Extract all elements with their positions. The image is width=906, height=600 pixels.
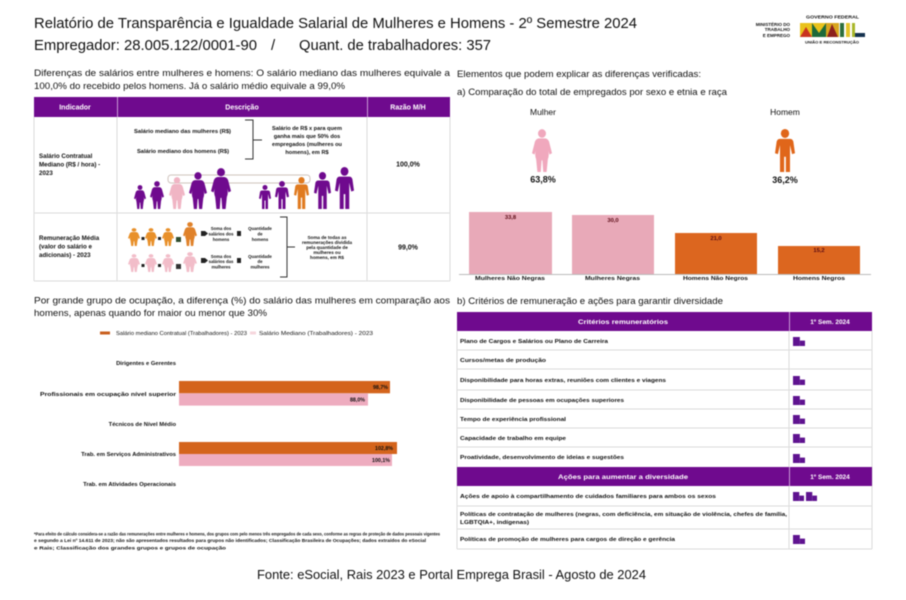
chart legend: Salário mediano Contratual (Trabalhadores) - 2023: [116, 331, 247, 337]
table header: [34, 97, 450, 117]
row 2 formula: mulheres ou: [313, 250, 341, 255]
government logos: MINISTÉRIO DO: [756, 20, 790, 27]
actions header: 1º Sem. 2024: [810, 474, 850, 481]
icon: men average group: [128, 222, 197, 246]
bar chart: occupation groups: Trab. em Serviços Administrativos: [81, 452, 176, 458]
row 2 formula: Quantidade: [248, 254, 272, 259]
actions header: Ações para aumentar a diversidade: [558, 474, 688, 481]
actions header: [457, 467, 872, 486]
row 1 label: [39, 153, 100, 177]
icon: criteria check marks: [793, 337, 805, 463]
footnote: [34, 532, 441, 550]
bar chart: employees by sex and race: 30,0: [607, 218, 619, 224]
icon: action check marks: [793, 492, 817, 544]
icon: woman: [532, 129, 552, 172]
footnote: e Rais; Classificação dos grandes grupos e grupos de ocupação: [34, 546, 226, 550]
government logos: E EMPREGO: [763, 33, 790, 38]
bar chart: employees by sex and race: 33,8: [505, 215, 517, 221]
row 2 formula: [201, 217, 352, 277]
panel: salary indicator table: [34, 97, 450, 281]
panel: men share: Homem: [770, 107, 800, 117]
bar chart: employees by sex and race: 15,2: [813, 248, 825, 254]
bar chart: occupation groups: Profissionais em ocupação nível superior: [40, 392, 177, 398]
row 1 description formula: homens), em R$: [285, 150, 329, 156]
heading: explaining elements: Elementos que podem explicar as diferenças verificadas:: [457, 69, 701, 79]
row 2 formula: de: [257, 259, 263, 264]
bar chart: occupation groups: Técnicos de Nível Médio: [109, 422, 176, 428]
heading: occupation groups: Por grande grupo de ocupação, a diferença (%) do salário das mulheres em comparação aos: [34, 296, 450, 306]
footnote: *Para efeito de cálculo considera-se a razão das remunerações entre mulheres e homens, dos grupos com pelo menos três empregados de cada sexo, conforme as regras de proteção de dados pessoais vigentes: [34, 532, 441, 536]
criteria rows: Proatividade, desenvolvimento de ideias e sugestões: [460, 455, 624, 461]
row 2 formula: salários das: [209, 259, 234, 264]
row 1 description formula: Salário mediano dos homens (R$): [137, 149, 229, 155]
criteria rows: Capacidade de trabalho em equipe: [460, 436, 567, 442]
row 1 description formula: empregados (mulheres ou: [272, 142, 343, 148]
actions rows: Ações de apoio à compartilhamento de cuidados familiares para ambos os sexos: [460, 494, 716, 500]
criteria header: [457, 312, 872, 331]
criteria rows: Tempo de experiência profissional: [460, 417, 566, 423]
ratio values: 99,0%: [398, 244, 419, 252]
row 1 label: Salário Contratual: [39, 153, 93, 160]
panel: criteria table: [457, 312, 872, 549]
icon: man: [775, 129, 795, 172]
row 2 formula: homens, em R$: [310, 255, 344, 260]
ratio values: [396, 162, 421, 252]
actions rows: Políticas de promoção de mulheres para cargos de direção e gerência: [460, 537, 676, 543]
employer line: [34, 37, 491, 54]
government logos: TRABALHO: [765, 27, 790, 32]
table header: Descrição: [225, 104, 259, 112]
heading: explaining elements: a) Comparação do total de empregados por sexo e etnia e raça: [457, 87, 727, 97]
salary differences paragraph: 100,0% do recebido pelos homens. Já o salário médio equivale a 99,0%: [34, 81, 346, 92]
icon: women average group: [128, 252, 197, 272]
bar chart: occupation groups: 98,7%: [373, 385, 388, 391]
row 2 formula: homens: [252, 237, 269, 242]
row 1 label: 2023: [39, 170, 53, 177]
row 2 formula: Quantidade: [248, 226, 272, 231]
panel: women share: Mulher: [530, 107, 556, 117]
government logos: UNIÃO E RECONSTRUÇÃO: [805, 40, 859, 44]
bar chart: occupation groups: 88,0%: [350, 398, 365, 404]
criteria rows: [460, 339, 666, 461]
row 2 label: (valor do salário e: [39, 244, 93, 250]
row 2 formula: mulheres: [211, 264, 231, 270]
bar chart: occupation groups: Trab. em Atividades Operacionais: [83, 482, 176, 488]
row 2 formula: homens: [213, 237, 230, 242]
employer line: /: [271, 37, 276, 54]
bar chart: employees by sex and race: Mulheres Negras: [585, 276, 640, 282]
row 1 description formula: Salário mediano das mulheres (R$): [134, 129, 231, 135]
median connector: [168, 175, 310, 183]
row 2 label: adicionais) - 2023: [39, 252, 91, 259]
bar chart: employees by sex and race: [459, 212, 871, 282]
employer line: Quant. de trabalhadores: 357: [299, 37, 491, 54]
row 2 formula: pela quantidade de: [306, 245, 348, 250]
bar chart: employees by sex and race: 21,0: [710, 236, 722, 242]
criteria header: 1º Sem. 2024: [810, 319, 850, 326]
heading: criteria: b) Critérios de remuneração e ações para garantir diversidade: [457, 296, 723, 306]
table header: Razão M/H: [390, 104, 426, 112]
source footer: Fonte: eSocial, Rais 2023 e Portal Emprega Brasil - Agosto de 2024: [257, 568, 646, 582]
bar chart: occupation groups: 102,8%: [375, 446, 393, 452]
row 2 formula: mulheres: [250, 264, 270, 270]
row 2 formula: remunerações dividida: [302, 240, 352, 245]
title: Relatório de Transparência e Igualdade Salarial de Mulheres e Homens - 2º Semestre 2024: [34, 15, 637, 32]
bar chart: occupation groups: 100,1%: [372, 458, 390, 464]
criteria rows: Cursos/metas de produção: [460, 358, 547, 364]
criteria rows: Plano de Cargos e Salários ou Plano de Carreira: [460, 339, 609, 345]
panel: men share: 36,2%: [772, 175, 798, 185]
bar chart: occupation groups: Dirigentes e Gerentes: [116, 361, 176, 367]
bar chart: employees by sex and race: Homens Negros: [793, 276, 845, 282]
row 2 formula: Soma de todas as: [307, 235, 347, 240]
row 2 formula: Soma dos: [211, 254, 232, 259]
bar chart: occupation groups: [40, 361, 397, 488]
salary differences paragraph: [34, 68, 451, 92]
government logos: [756, 14, 865, 44]
actions rows: LGBTQIA+, indígenas): [460, 520, 529, 526]
table header: Indicador: [59, 104, 91, 112]
employer line: Empregador: 28.005.122/0001-90: [34, 37, 257, 54]
row 2 formula: salários dos: [208, 232, 234, 236]
ratio values: 100,0%: [396, 162, 421, 168]
row 1 description formula: ganha mais que 50% dos: [274, 134, 340, 140]
actions rows: [460, 494, 787, 543]
heading: occupation groups: [34, 296, 450, 319]
heading: occupation groups: homens, apenas quando for maior ou menor que 30%: [34, 308, 268, 319]
chart legend: [100, 331, 373, 337]
chart legend: Salário Mediano (Trabalhadores) - 2023: [259, 331, 373, 337]
row 1 description formula: Salário de R$ x para quem: [272, 126, 342, 132]
actions rows: Políticas de contratação de mulheres (negras, com deficiência, em situação de violência, chefes de família,: [460, 512, 787, 518]
criteria rows: Disponibilidade de pessoas em ocupações superiores: [460, 398, 624, 404]
row 1 label: Mediano (R$ / hora) -: [39, 162, 100, 168]
criteria rows: Disponibilidade para horas extras, reuniões com clientes e viagens: [460, 378, 666, 384]
row 2 formula: Soma dos: [211, 226, 232, 231]
panel: women share: 63,8%: [530, 174, 556, 184]
panel: women share: [530, 107, 556, 184]
row 2 formula: de: [257, 232, 263, 236]
heading: explaining elements: [457, 69, 727, 97]
panel: men share: [770, 107, 800, 185]
row 2 label: [39, 235, 100, 259]
icon: men group: [259, 167, 354, 209]
bar chart: employees by sex and race: Homens Não Negros: [683, 276, 748, 282]
criteria header: Critérios remuneratórios: [578, 319, 668, 326]
salary differences paragraph: Diferenças de salários entre mulheres e homens: O salário mediano das mulheres equivale a: [34, 68, 451, 79]
row 2 label: Remuneração Média: [39, 235, 100, 242]
row 1 description formula: [134, 120, 343, 159]
icon: women group: [134, 168, 231, 209]
bar chart: employees by sex and race: Mulheres Não Negras: [475, 276, 545, 282]
government logos: GOVERNO FEDERAL: [806, 14, 859, 20]
footnote: e segundo a Lei nº 14.611 de 2023; não são apresentados resultados para grupos não identificados; Classificação Brasileira de Ocupações; dados extraídos do eSocial: [34, 538, 426, 543]
